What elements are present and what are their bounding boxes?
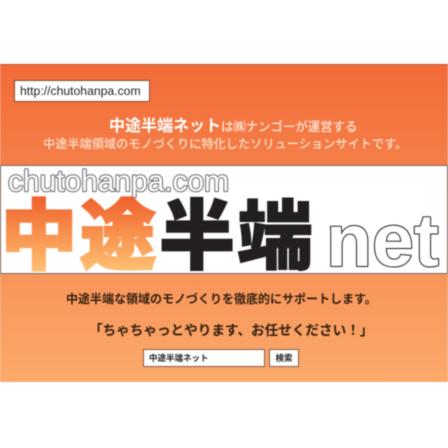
text block: tagline: 中途半端な領域のモノづくりを徹底的にサポートします。 [66, 292, 377, 306]
logo: chutohanpa net [0, 164, 448, 275]
search input: 中途半端ネット [149, 353, 209, 363]
panel: orange gradient background [0, 64, 448, 382]
search button: 検索 [275, 353, 292, 363]
search button [269, 349, 299, 367]
text block: slogan: 「ちゃちゃっとやります、お任せください！」 [89, 323, 373, 338]
text block: site description: 中途半端領域のモノづくりに特化したソリューションサイトです。 [43, 137, 407, 151]
heading: operator line: 中途半端ネットは㈱ナンゴーが運営する [109, 118, 357, 135]
search input [143, 349, 265, 367]
url box: http://chutohanpa.com [20, 84, 141, 98]
url box [14, 80, 150, 102]
logo: chutohanpa net: chutohanpa.com [8, 165, 229, 198]
